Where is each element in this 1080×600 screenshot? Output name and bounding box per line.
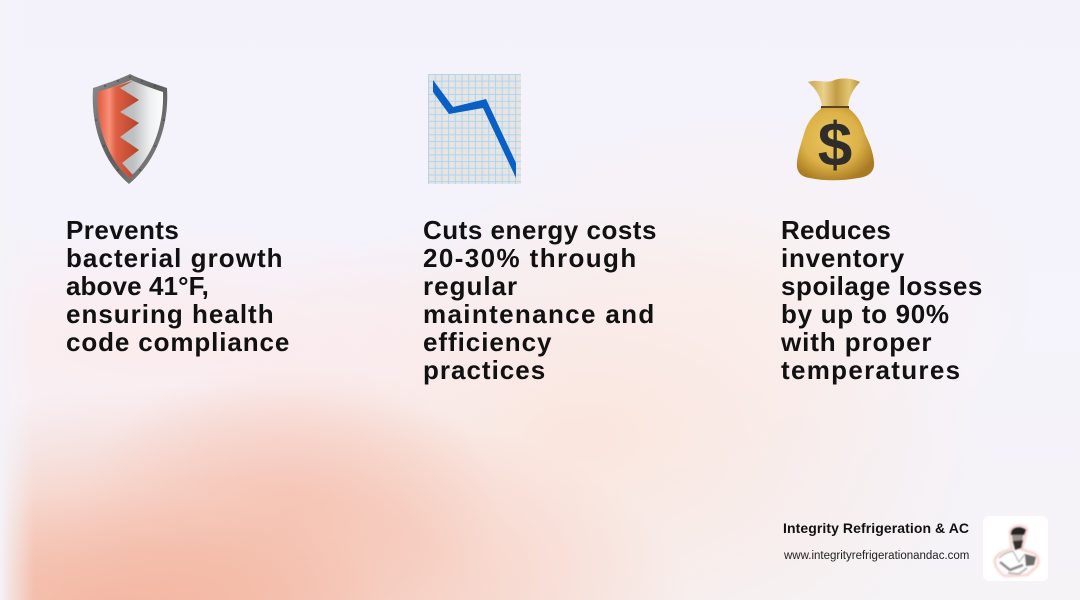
icon: shield	[92, 74, 168, 184]
icon: money bag: $	[818, 111, 852, 180]
text: energy costs benefit: maintenance and	[423, 299, 656, 329]
text: energy costs benefit	[423, 215, 657, 385]
text: bacterial growth benefit: Prevents	[66, 215, 179, 245]
text: energy costs benefit: regular	[423, 271, 518, 301]
icon: money bag	[796, 78, 874, 180]
text: energy costs benefit: practices	[423, 355, 546, 385]
text: energy costs benefit: 20-30% through	[423, 243, 638, 273]
text: spoilage benefit: by up to 90%	[781, 299, 950, 329]
text: bacterial growth benefit: above 41°F,	[66, 271, 209, 301]
text: bacterial growth benefit: bacterial growth	[66, 243, 284, 273]
text: spoilage benefit	[780, 215, 983, 385]
text: spoilage benefit: temperatures	[781, 355, 961, 385]
text: spoilage benefit: inventory	[781, 243, 905, 273]
company name: Integrity Refrigeration & AC	[783, 520, 969, 536]
text: bacterial growth benefit: ensuring health	[66, 299, 275, 329]
text: spoilage benefit: Reduces	[781, 215, 891, 245]
website url: www.integrityrefrigerationandac.com	[784, 550, 969, 562]
icon: declining chart	[428, 74, 521, 184]
text: spoilage benefit: with proper	[781, 327, 932, 357]
text: bacterial growth benefit: code compliance	[66, 327, 290, 357]
text: bacterial growth benefit	[66, 215, 290, 357]
text: energy costs benefit: Cuts energy costs	[423, 215, 657, 245]
text: energy costs benefit: efficiency	[423, 327, 552, 357]
text: spoilage benefit: spoilage losses	[781, 271, 983, 301]
logo: technician portrait	[983, 516, 1048, 581]
